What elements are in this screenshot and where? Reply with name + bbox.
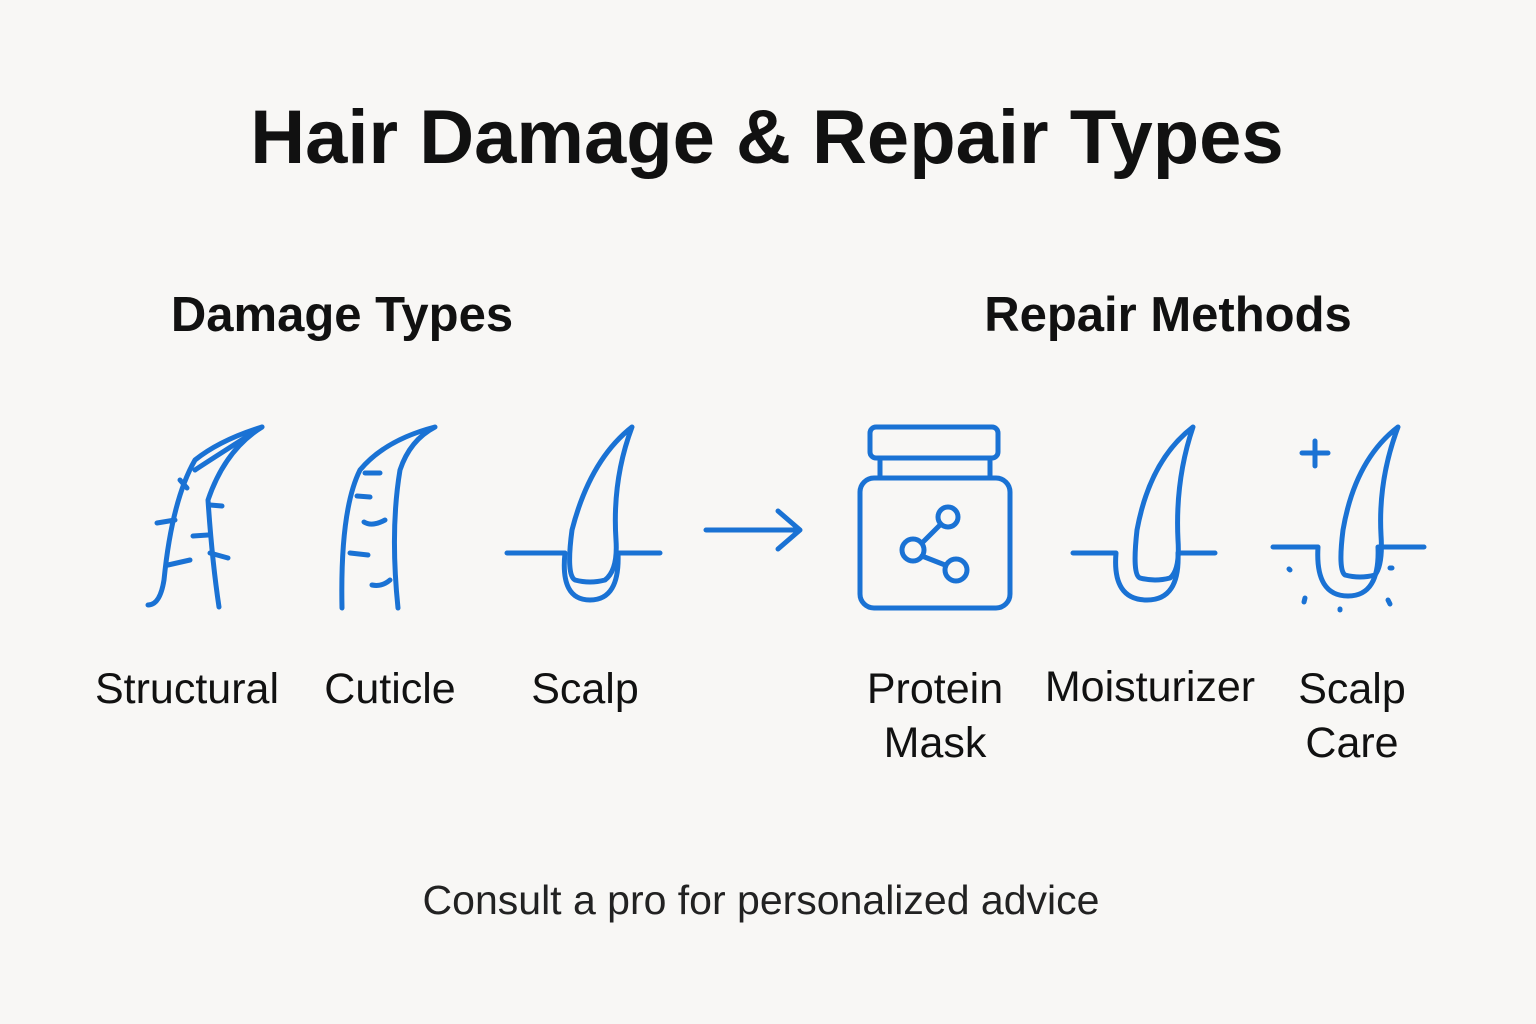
label: scalp: Scalp [531, 665, 639, 713]
label: scalp care: Care [1305, 719, 1399, 767]
icon: scalp care [1273, 427, 1424, 610]
icon: moisturizer [1073, 427, 1215, 600]
heading: repair methods: Repair Methods [984, 288, 1352, 342]
label: moisturizer: Moisturizer [1045, 663, 1255, 711]
arrow [706, 511, 800, 549]
label: protein mask: Protein [867, 665, 1003, 713]
icon: structural damage [148, 427, 262, 607]
icon: scalp damage [507, 427, 660, 600]
heading: damage types: Damage Types [171, 288, 513, 342]
label: scalp care: Scalp [1298, 665, 1406, 713]
label: cuticle: Cuticle [324, 665, 456, 713]
icon: protein mask jar [860, 427, 1010, 608]
icon: cuticle damage [342, 427, 435, 608]
footer note: Consult a pro for personalized advice [423, 877, 1099, 923]
title: Hair Damage & Repair Types [250, 95, 1284, 180]
label: protein mask: Mask [884, 719, 987, 767]
label: structural: Structural [95, 665, 279, 713]
